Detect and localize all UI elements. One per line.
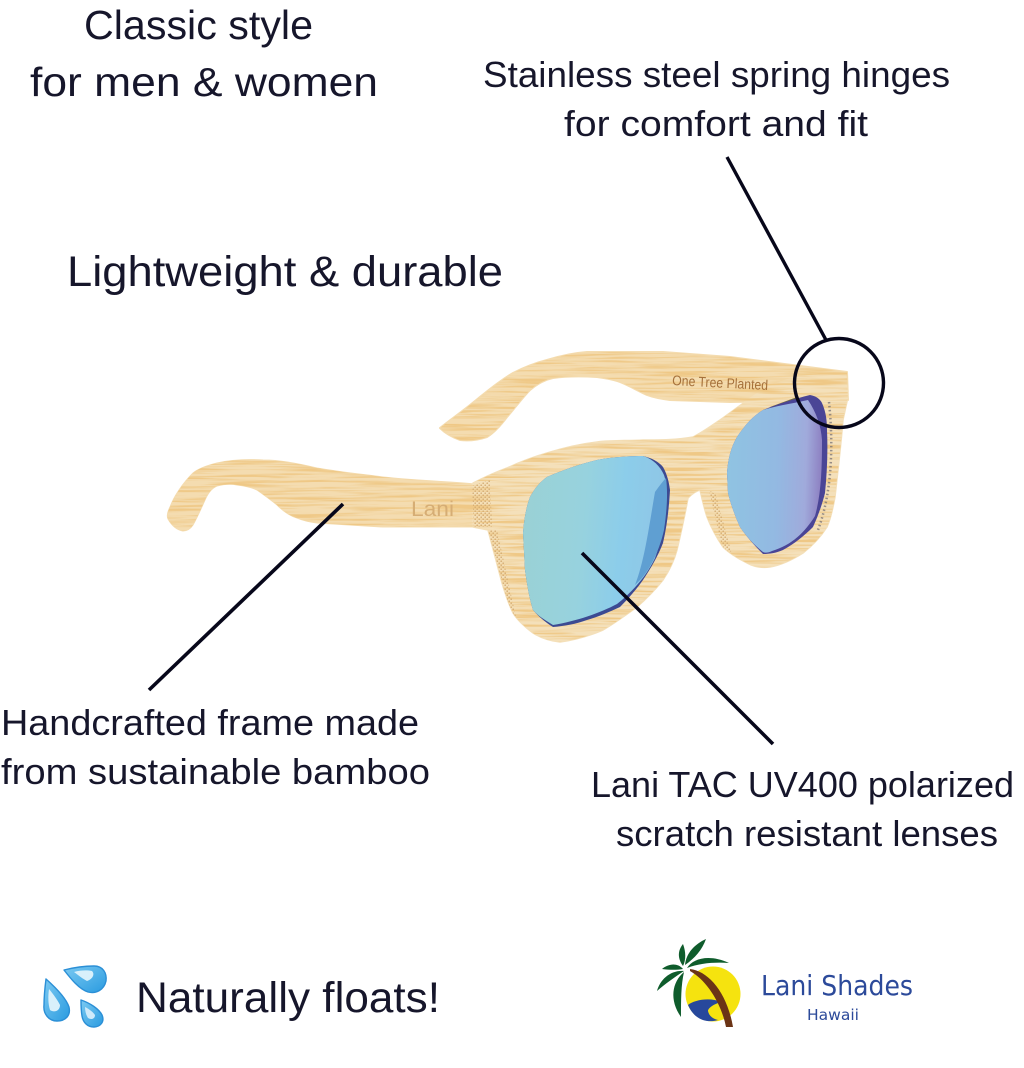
text: naturally floats: Naturally floats!	[136, 974, 440, 1022]
callout text: bamboo frame	[1, 702, 430, 792]
leader line: lens	[582, 553, 773, 744]
far temple arm	[440, 352, 848, 440]
illustration: bamboo sunglasses	[160, 345, 860, 650]
heading: classic style	[30, 2, 378, 105]
left lens	[523, 456, 670, 627]
callout text: spring hinges: Stainless steel spring hinges	[483, 54, 950, 95]
engraving: One Tree Planted: One Tree Planted	[672, 372, 769, 393]
right lens	[727, 395, 831, 554]
icon: water drops	[44, 966, 106, 1027]
heading: lightweight and durable: Lightweight & durable	[67, 248, 503, 296]
callout text: spring hinges	[483, 54, 950, 144]
logo palm trunk	[690, 969, 733, 1027]
near temple arm	[167, 460, 475, 531]
callout text: lenses: scratch resistant lenses	[616, 813, 998, 854]
logo: Lani Shades Hawaii	[657, 939, 913, 1027]
front frame	[473, 372, 848, 642]
callout text: spring hinges: for comfort and fit	[564, 103, 868, 144]
leader line: bamboo frame	[149, 504, 343, 690]
callout text: lenses	[591, 764, 1014, 854]
heading: classic style: for men & women	[30, 59, 378, 105]
logo sun	[686, 966, 740, 1022]
logo wordmark: Lani Shades	[761, 969, 913, 1002]
callout circle: hinge	[794, 338, 884, 428]
heading: classic style: Classic style	[84, 2, 313, 48]
callout text: lenses: Lani TAC UV400 polarized	[591, 764, 1014, 805]
callout text: bamboo frame: Handcrafted frame made	[1, 702, 419, 743]
leader line: hinges	[727, 157, 826, 340]
engraving: Lani: Lani	[411, 498, 454, 521]
logo wave	[688, 999, 721, 1021]
logo subtitle: Hawaii	[807, 1006, 859, 1024]
wood grain texture	[160, 345, 860, 650]
callout text: bamboo frame: from sustainable bamboo	[1, 751, 430, 792]
logo palm leaves	[657, 939, 729, 1017]
